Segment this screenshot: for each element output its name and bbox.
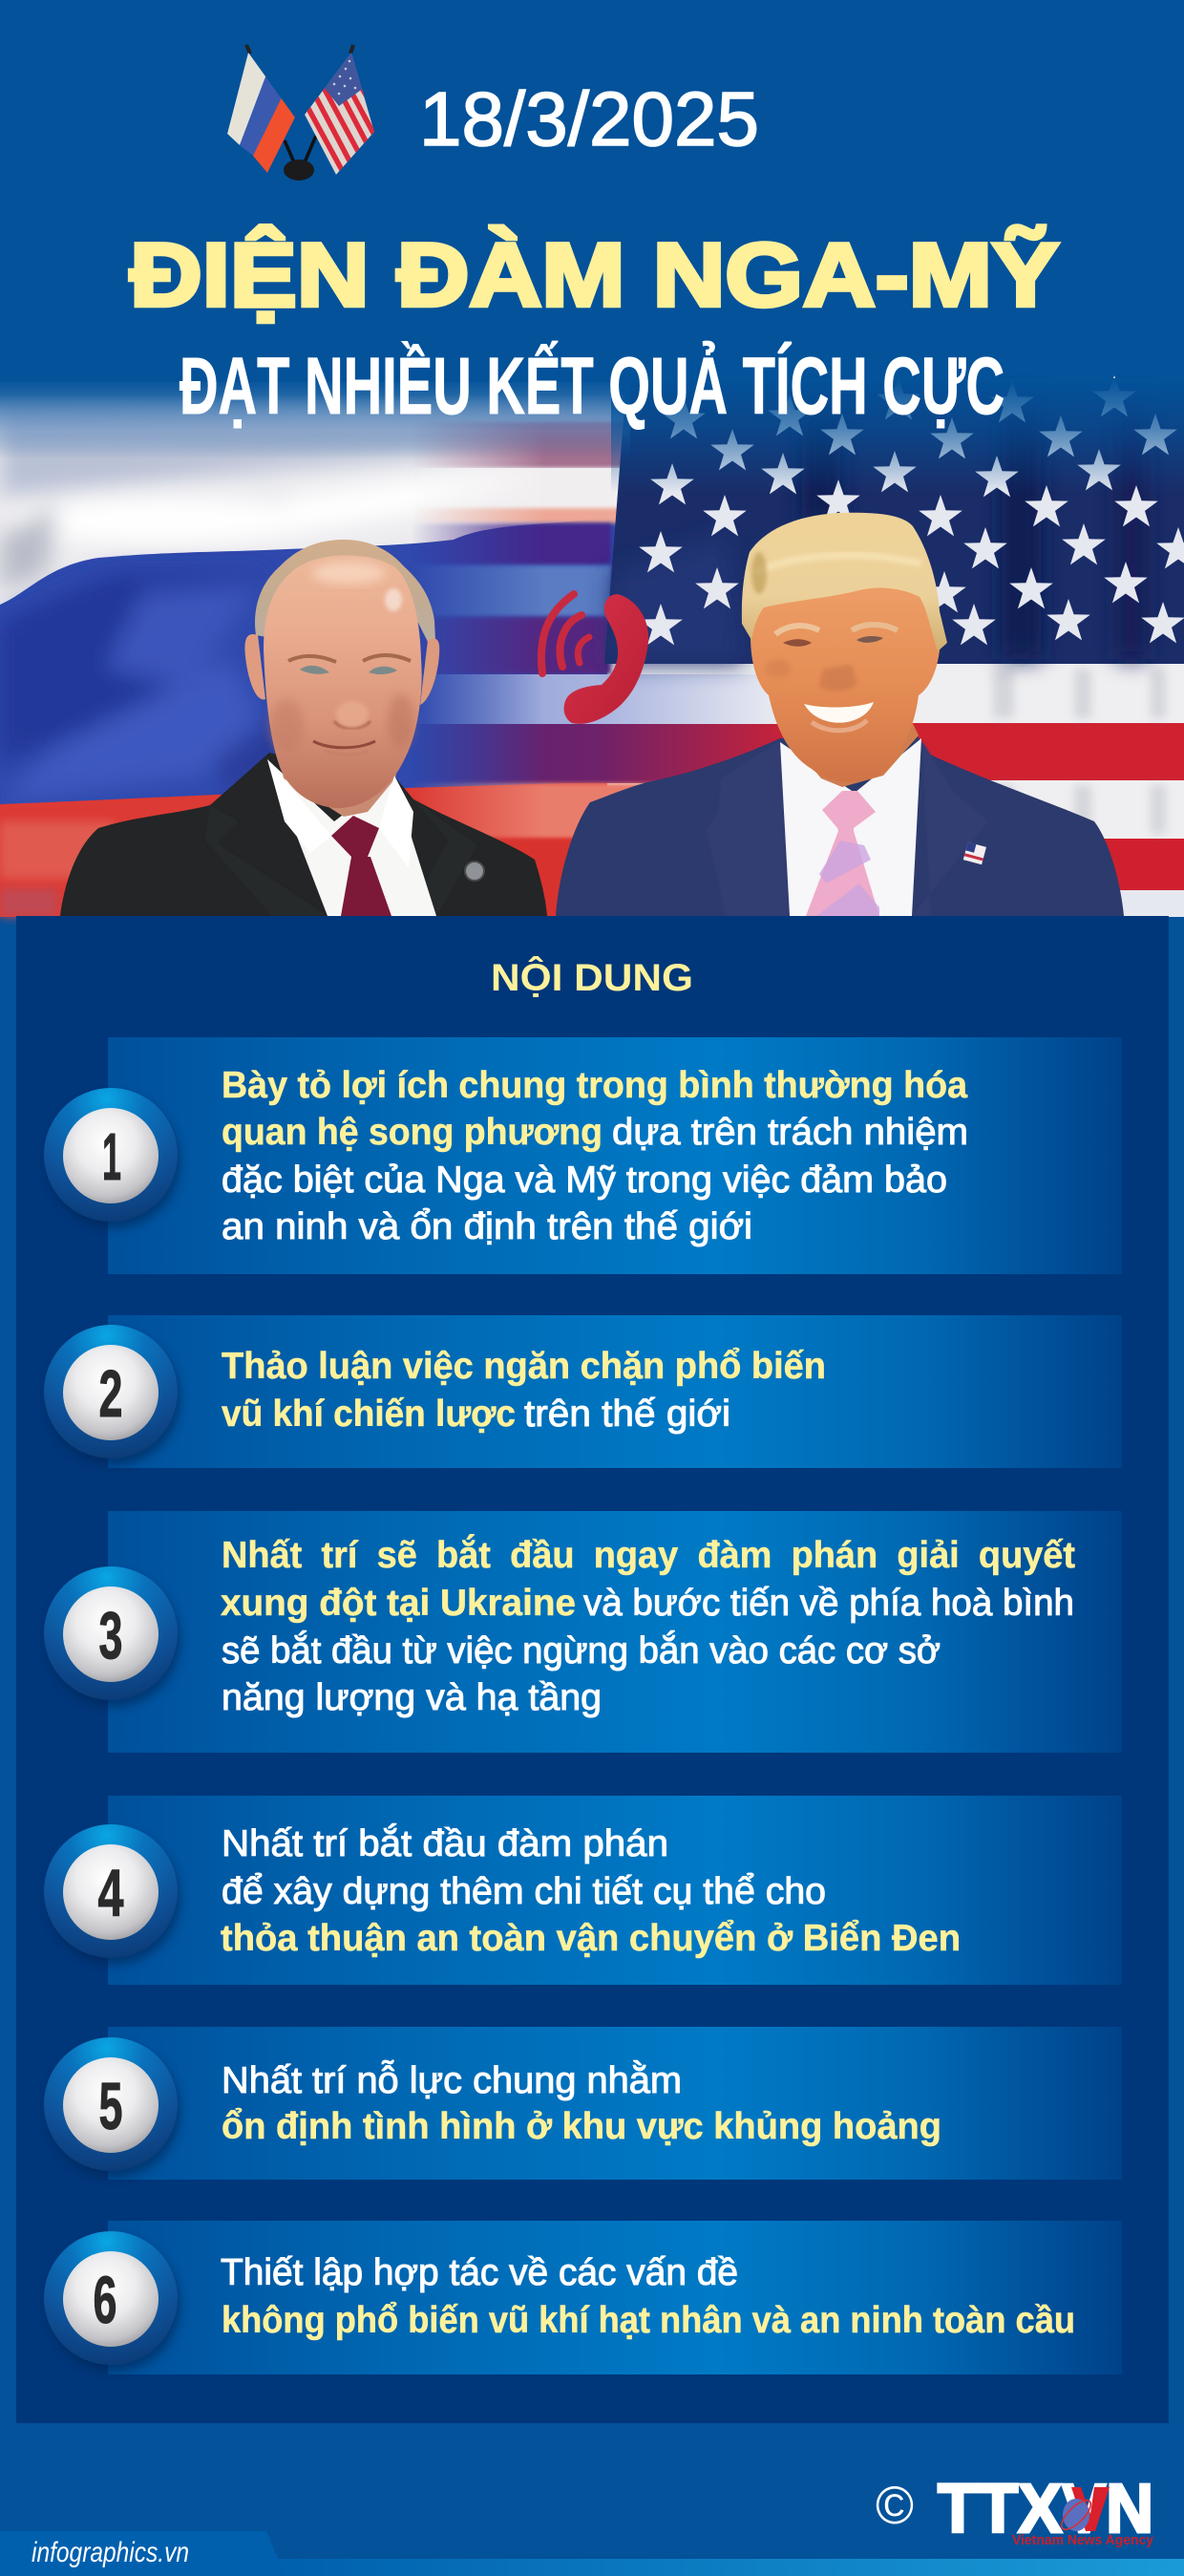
item 5 xyxy=(44,2027,1122,2180)
item 3: Nhất trí sẽ bắt đầu ngay đàm phán giải quyết xyxy=(222,1534,1075,1576)
item 6: 6 xyxy=(94,2263,116,2337)
item 2: vũ khí chiến lược xyxy=(222,1394,516,1435)
item 4 xyxy=(44,1796,1122,1985)
panel: content xyxy=(16,916,1169,2423)
shirt xyxy=(780,738,921,916)
american flag stripes xyxy=(607,664,1184,917)
lapels xyxy=(707,740,790,916)
hero flags backdrop xyxy=(0,375,1184,917)
hair xyxy=(742,513,947,651)
item 6 xyxy=(44,2221,1122,2374)
tie xyxy=(331,816,391,916)
portrait: Trump xyxy=(556,513,1124,916)
stars xyxy=(639,375,1184,645)
item 4: 4 xyxy=(97,1856,124,1930)
tie xyxy=(806,791,879,916)
logo: TTXVN: TTXVN xyxy=(938,2471,1153,2547)
lapel pin xyxy=(465,862,484,881)
item 1 xyxy=(44,1037,1122,1274)
item 3: sẽ bắt đầu từ việc ngừng bắn vào các cơ sở xyxy=(222,1630,941,1671)
item 1: 1 xyxy=(102,1119,121,1194)
face xyxy=(264,555,422,808)
footer tab with site name xyxy=(0,2531,285,2576)
ears xyxy=(244,634,265,699)
item 5: ổn định tình hình ở khu vực khủng hoảng xyxy=(222,2106,941,2147)
title: ĐIỆN ĐÀM NGA-MỸ xyxy=(130,224,1059,325)
item 5: Nhất trí nỗ lực chung nhằm xyxy=(222,2060,682,2101)
item 1: đặc biệt của Nga và Mỹ trong việc đảm bảo xyxy=(222,1160,947,1201)
russian flag xyxy=(0,382,630,917)
item 2: trên thế giới xyxy=(524,1394,730,1435)
item 4: Nhất trí bắt đầu đàm phán xyxy=(222,1823,668,1864)
suit xyxy=(60,753,547,916)
american flag canton xyxy=(604,375,1184,664)
hair xyxy=(255,540,436,659)
item 2 xyxy=(44,1315,1122,1468)
footer bar xyxy=(267,2559,1184,2576)
suit xyxy=(556,734,1124,916)
heading: NỘI DUNG xyxy=(491,955,693,999)
portrait: Putin xyxy=(60,540,547,916)
collar xyxy=(267,759,413,868)
poles and stand xyxy=(246,45,353,181)
nose xyxy=(819,665,857,692)
item 1: an ninh và ổn định trên thế giới xyxy=(222,1206,752,1247)
item 5: 5 xyxy=(99,2069,122,2143)
item 1: dựa trên trách nhiệm xyxy=(612,1112,968,1153)
item 3: xung đột tại Ukraine xyxy=(221,1583,576,1624)
nose and mouth xyxy=(313,701,375,755)
russian flag xyxy=(227,53,295,173)
footer tab with site name: infographics.vn xyxy=(32,2537,189,2568)
copyright mark: © xyxy=(876,2475,914,2535)
item 4: để xây dựng thêm chi tiết cụ thể cho xyxy=(222,1871,826,1912)
fades xyxy=(0,378,630,458)
neck xyxy=(275,726,406,817)
item 1: Bày tỏ lợi ích chung trong bình thường hóa xyxy=(222,1065,967,1106)
item 3: và bước tiến về phía hoà bình xyxy=(583,1583,1074,1624)
brows and eyes xyxy=(288,655,411,674)
item 3 xyxy=(44,1511,1122,1753)
logo: TTXVN: Vietnam News Agency xyxy=(1012,2532,1154,2548)
shirt xyxy=(267,759,436,916)
item 6: không phổ biến vũ khí hạt nhân và an ninh toàn cầu xyxy=(222,2300,1075,2341)
face xyxy=(751,573,941,781)
american flag xyxy=(305,53,374,175)
icon: red phone with signal waves xyxy=(541,594,648,724)
item 2: 2 xyxy=(99,1356,122,1431)
item 2: Thảo luận việc ngăn chặn phổ biến xyxy=(222,1346,826,1387)
neck xyxy=(785,712,919,787)
item 3: năng lượng và hạ tầng xyxy=(222,1677,602,1718)
item 6: Thiết lập hợp tác về các vấn đề xyxy=(221,2252,738,2293)
date: 18/3/2025 xyxy=(419,76,759,161)
item 1: quan hệ song phương xyxy=(222,1112,603,1153)
brows and eyes xyxy=(765,625,898,678)
item 4: thỏa thuận an toàn vận chuyển ở Biển Đen xyxy=(221,1918,961,1959)
forehead highlight xyxy=(312,562,385,585)
item 3: 3 xyxy=(99,1598,122,1672)
blended stripes over russian flag xyxy=(411,422,793,917)
icon: desk flags of Russia and USA xyxy=(227,45,401,196)
flag pin xyxy=(963,842,986,864)
smile xyxy=(804,702,874,731)
